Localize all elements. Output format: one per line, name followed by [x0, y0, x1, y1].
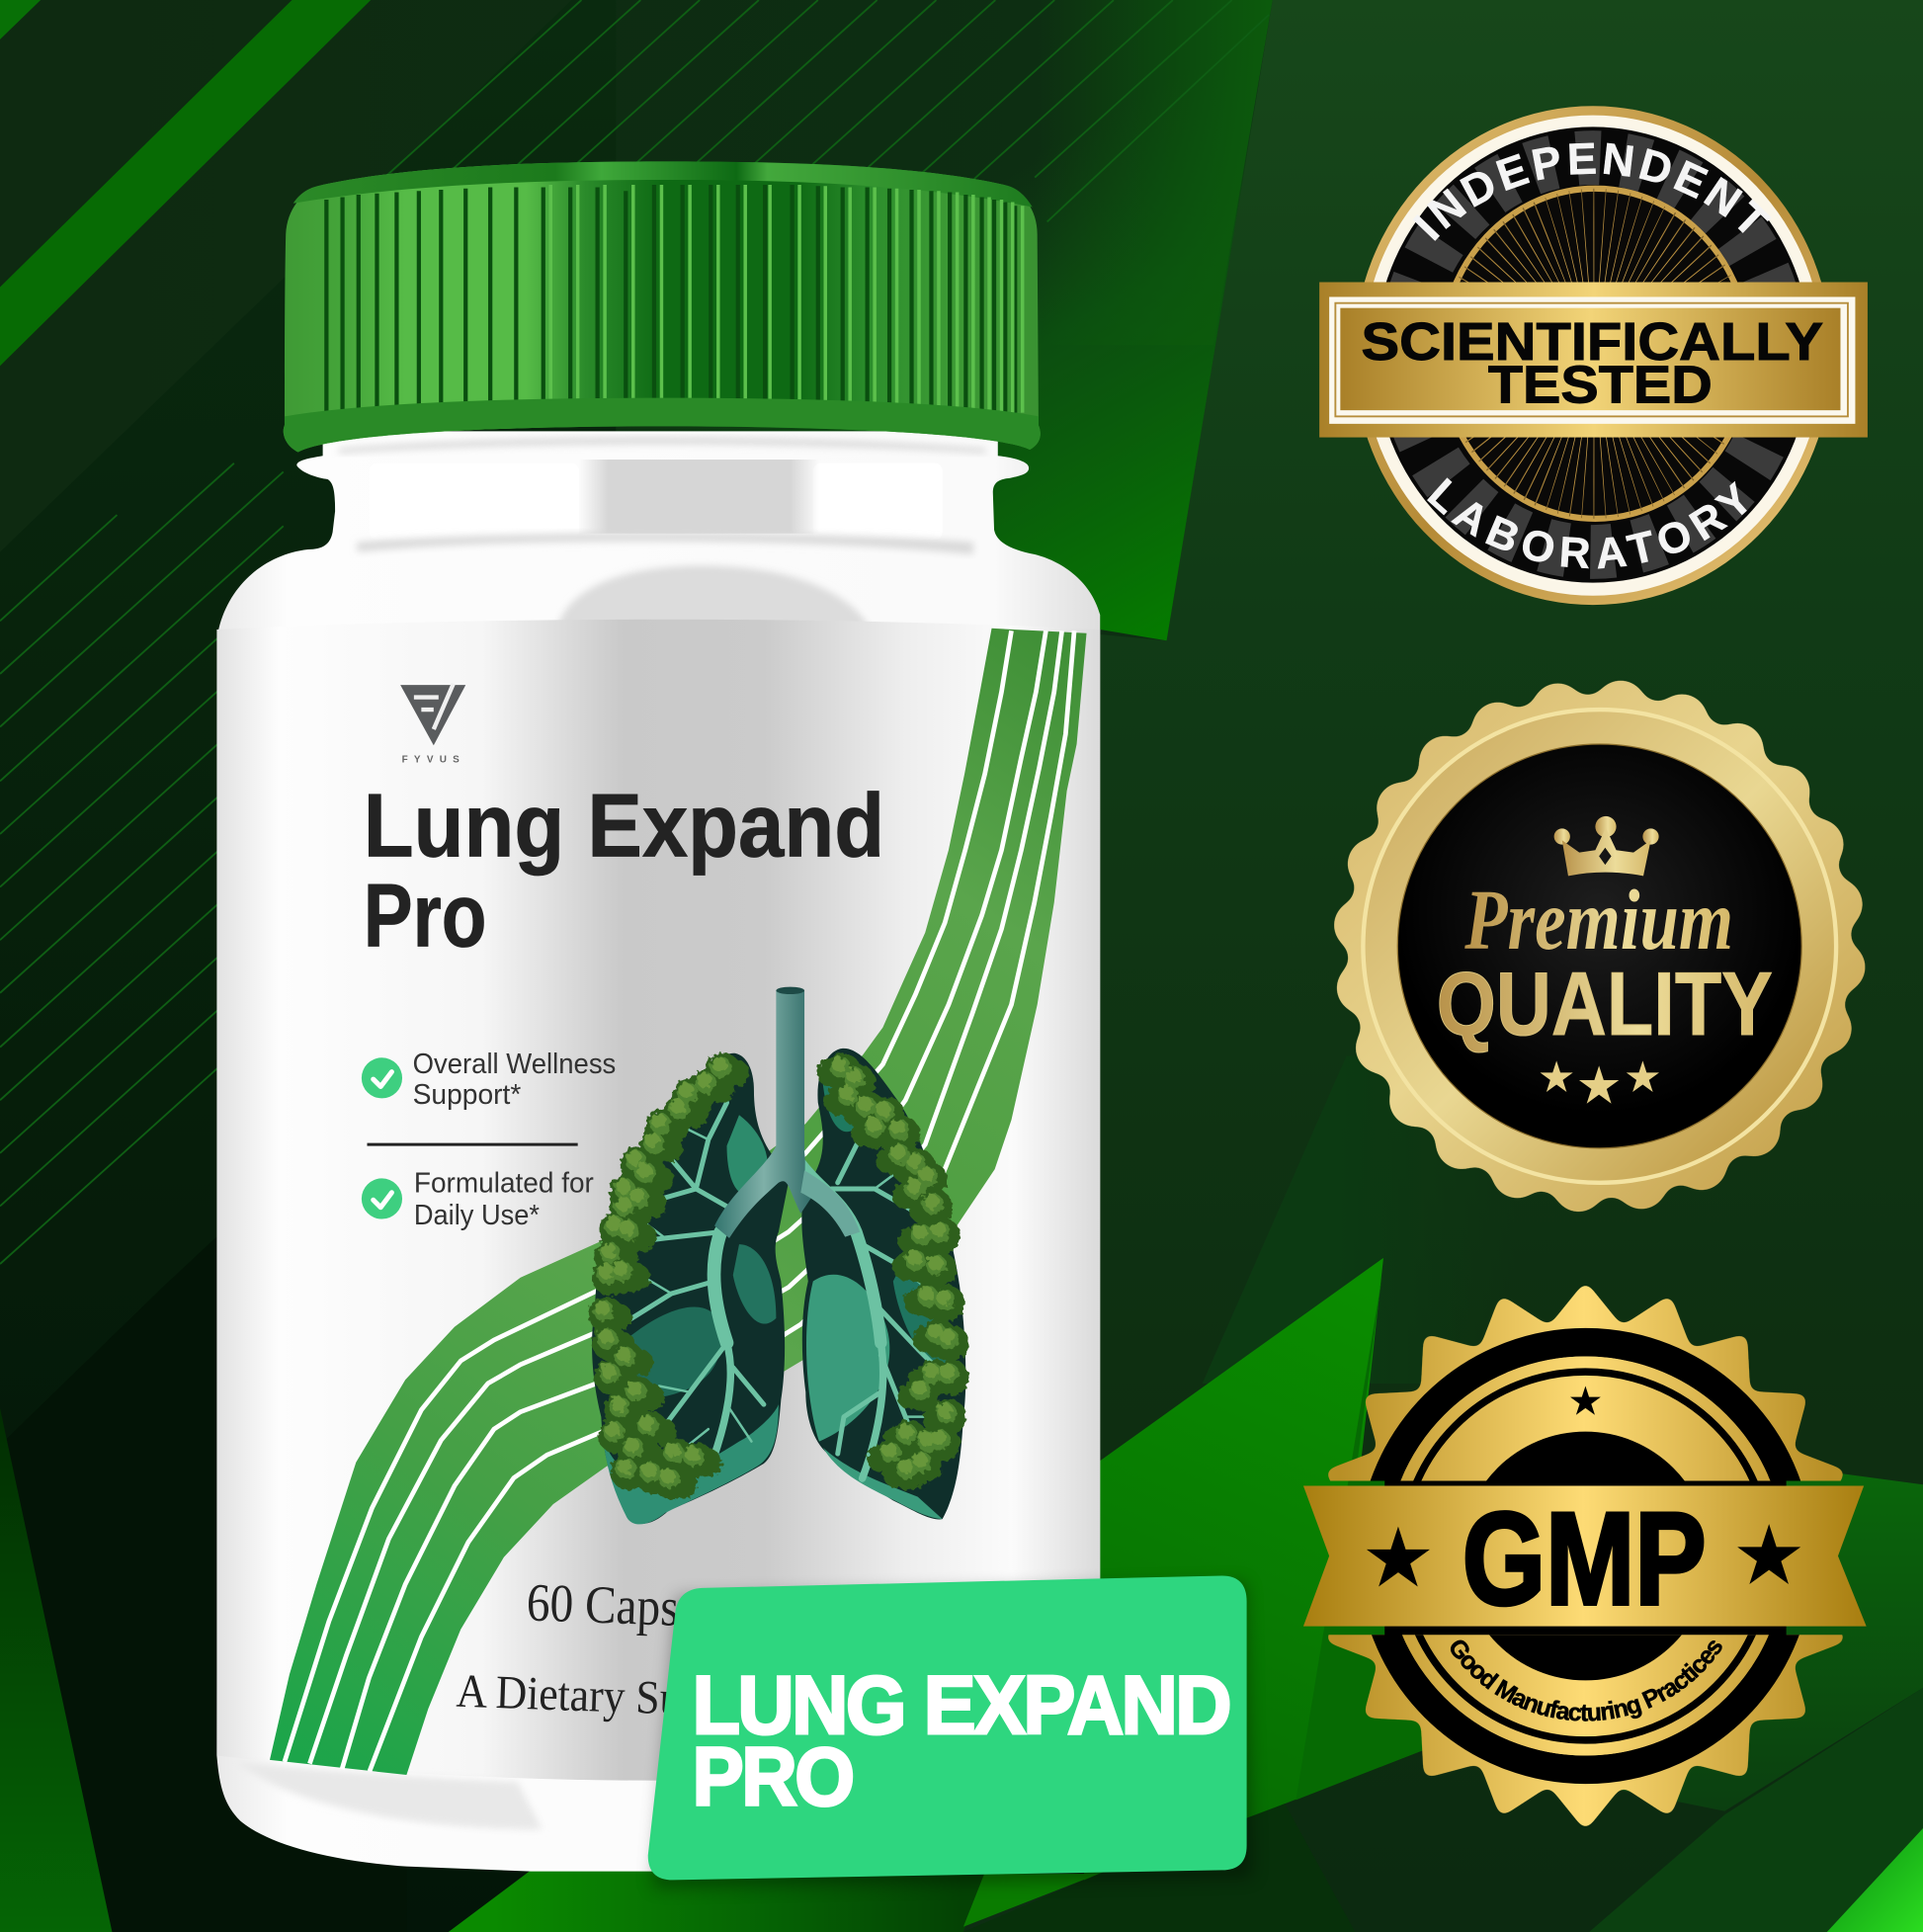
- badge: scientifically tested: [1319, 106, 1868, 605]
- stars: [1541, 1060, 1659, 1104]
- product name: Pro: [364, 866, 486, 966]
- benefit: daily use: Daily Use*: [414, 1200, 540, 1231]
- logo: FYVUS: FYVUS: [402, 755, 465, 766]
- bottle cap: [284, 161, 1041, 453]
- green product sticker: PRO: [693, 1729, 853, 1822]
- right lung: [800, 1049, 965, 1519]
- banner: TESTED: [1488, 356, 1713, 415]
- badge: premium quality: Premium: [1463, 872, 1733, 967]
- bottle body: [216, 431, 1100, 1872]
- dietary supplement line: A Dietary Supplement: [456, 1664, 843, 1730]
- trachea: [714, 987, 860, 1238]
- benefit: daily use: [362, 1168, 594, 1231]
- neck and shoulder shading: [339, 438, 985, 629]
- sticker shadow: [653, 1583, 1252, 1888]
- curved text: laboratory: LABORATORY: [1427, 477, 1747, 569]
- benefit: overall wellness: Support*: [413, 1079, 521, 1111]
- badge: premium quality: [1334, 680, 1866, 1212]
- green product sticker: LUNG EXPAND: [693, 1658, 1229, 1751]
- ribbon: GMP: [1463, 1485, 1707, 1633]
- banner: [1319, 282, 1868, 438]
- benefit: daily use: Formulated for: [414, 1168, 594, 1200]
- badge: premium quality: QUALITY: [1437, 955, 1773, 1054]
- banner: SCIENTIFICALLY: [1362, 312, 1823, 372]
- badge: GMP: [1303, 1286, 1867, 1826]
- lungs illustration: [592, 987, 965, 1524]
- moss texture: [595, 1057, 959, 1492]
- green product sticker: [648, 1575, 1247, 1880]
- logo: FYVUS: [400, 684, 465, 766]
- product name: Lung Expand: [364, 776, 884, 876]
- benefit: overall wellness: [362, 1049, 616, 1111]
- bottle base shading: [234, 1762, 543, 1829]
- left lung: [592, 1053, 789, 1524]
- benefit: overall wellness: Overall Wellness: [413, 1049, 616, 1080]
- product bottle: [216, 161, 1100, 1872]
- capsule count: 60 Capsules: [526, 1573, 755, 1640]
- ribbon: [1303, 1485, 1867, 1633]
- curved text: independent: INDEPENDENT: [1413, 142, 1771, 241]
- icon: crown: [1554, 816, 1659, 876]
- curved text: good manufacturing practices: Good Manufacturing Practices: [1451, 1640, 1722, 1722]
- sunburst rays: [1502, 263, 1687, 448]
- product name: [364, 776, 884, 966]
- green swoosh stripes: [270, 629, 1087, 1775]
- label background: [216, 620, 1100, 1781]
